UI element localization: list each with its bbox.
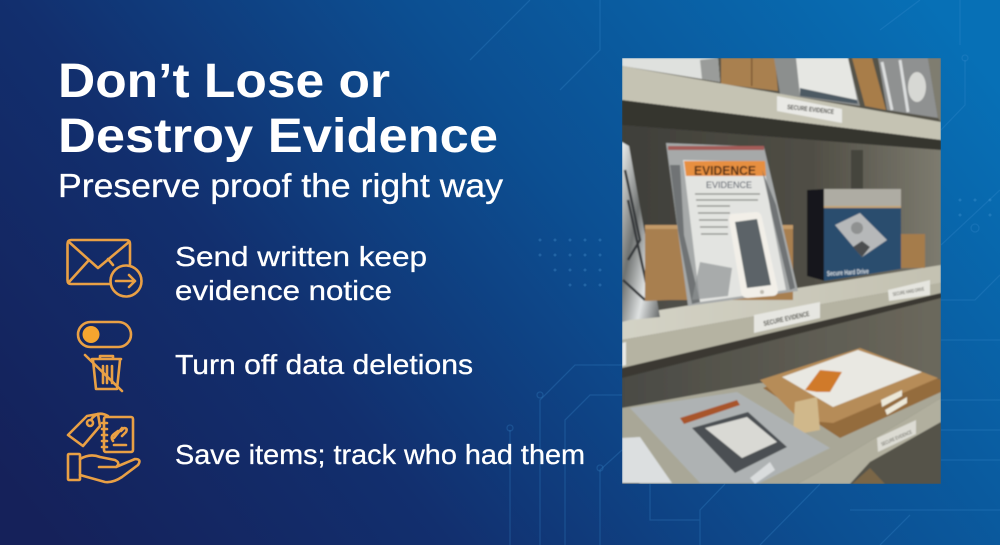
title	[58, 55, 498, 163]
item text: written notice: Send written keep	[175, 241, 427, 272]
evidence pouch with drive	[622, 392, 830, 484]
item text: written notice	[175, 241, 427, 306]
shelf 2 edge with labels	[622, 280, 941, 378]
item text: save items: Save items; track who had them	[175, 439, 585, 470]
circuit pattern	[470, 0, 1000, 545]
cardboard box	[645, 227, 793, 301]
bag at left	[622, 142, 660, 322]
shelf 2 edge with labels: SECURE HARD DRIVE	[892, 286, 925, 298]
dot pattern	[538, 198, 992, 286]
shelf 3 surface	[622, 381, 941, 484]
shelf 3 edge	[797, 398, 941, 484]
shelf 2 surface	[622, 265, 941, 340]
tagged envelopes	[760, 348, 941, 438]
title: Don’t Lose or	[58, 55, 390, 108]
shelf 1 with items	[622, 58, 941, 189]
evidence bag: EVIDENCE	[694, 163, 756, 178]
icon: tag, notebook and hand	[68, 414, 139, 482]
evidence bag	[666, 143, 798, 306]
title: Destroy Evidence	[58, 110, 498, 163]
hard drive box: Secure Hard Drive	[827, 268, 869, 278]
evidence bag: EVIDENCE	[706, 180, 752, 191]
item text: data deletions: Turn off data deletions	[175, 349, 473, 380]
icon: toggle and crossed-out trash	[78, 322, 131, 391]
shelf 1 with items: SECURE EVIDENCE	[787, 104, 835, 116]
icon: envelope with arrow	[68, 240, 142, 296]
photo: evidence shelves: SECURE EVIDENCE	[880, 429, 914, 448]
hard drive box	[807, 189, 901, 281]
phone	[729, 212, 778, 298]
item text: written notice: evidence notice	[175, 275, 392, 306]
shelf 2 edge with labels: SECURE EVIDENCE	[763, 311, 811, 328]
subtitle: Preserve proof the right way	[58, 167, 504, 204]
photo: evidence shelves	[622, 58, 941, 484]
